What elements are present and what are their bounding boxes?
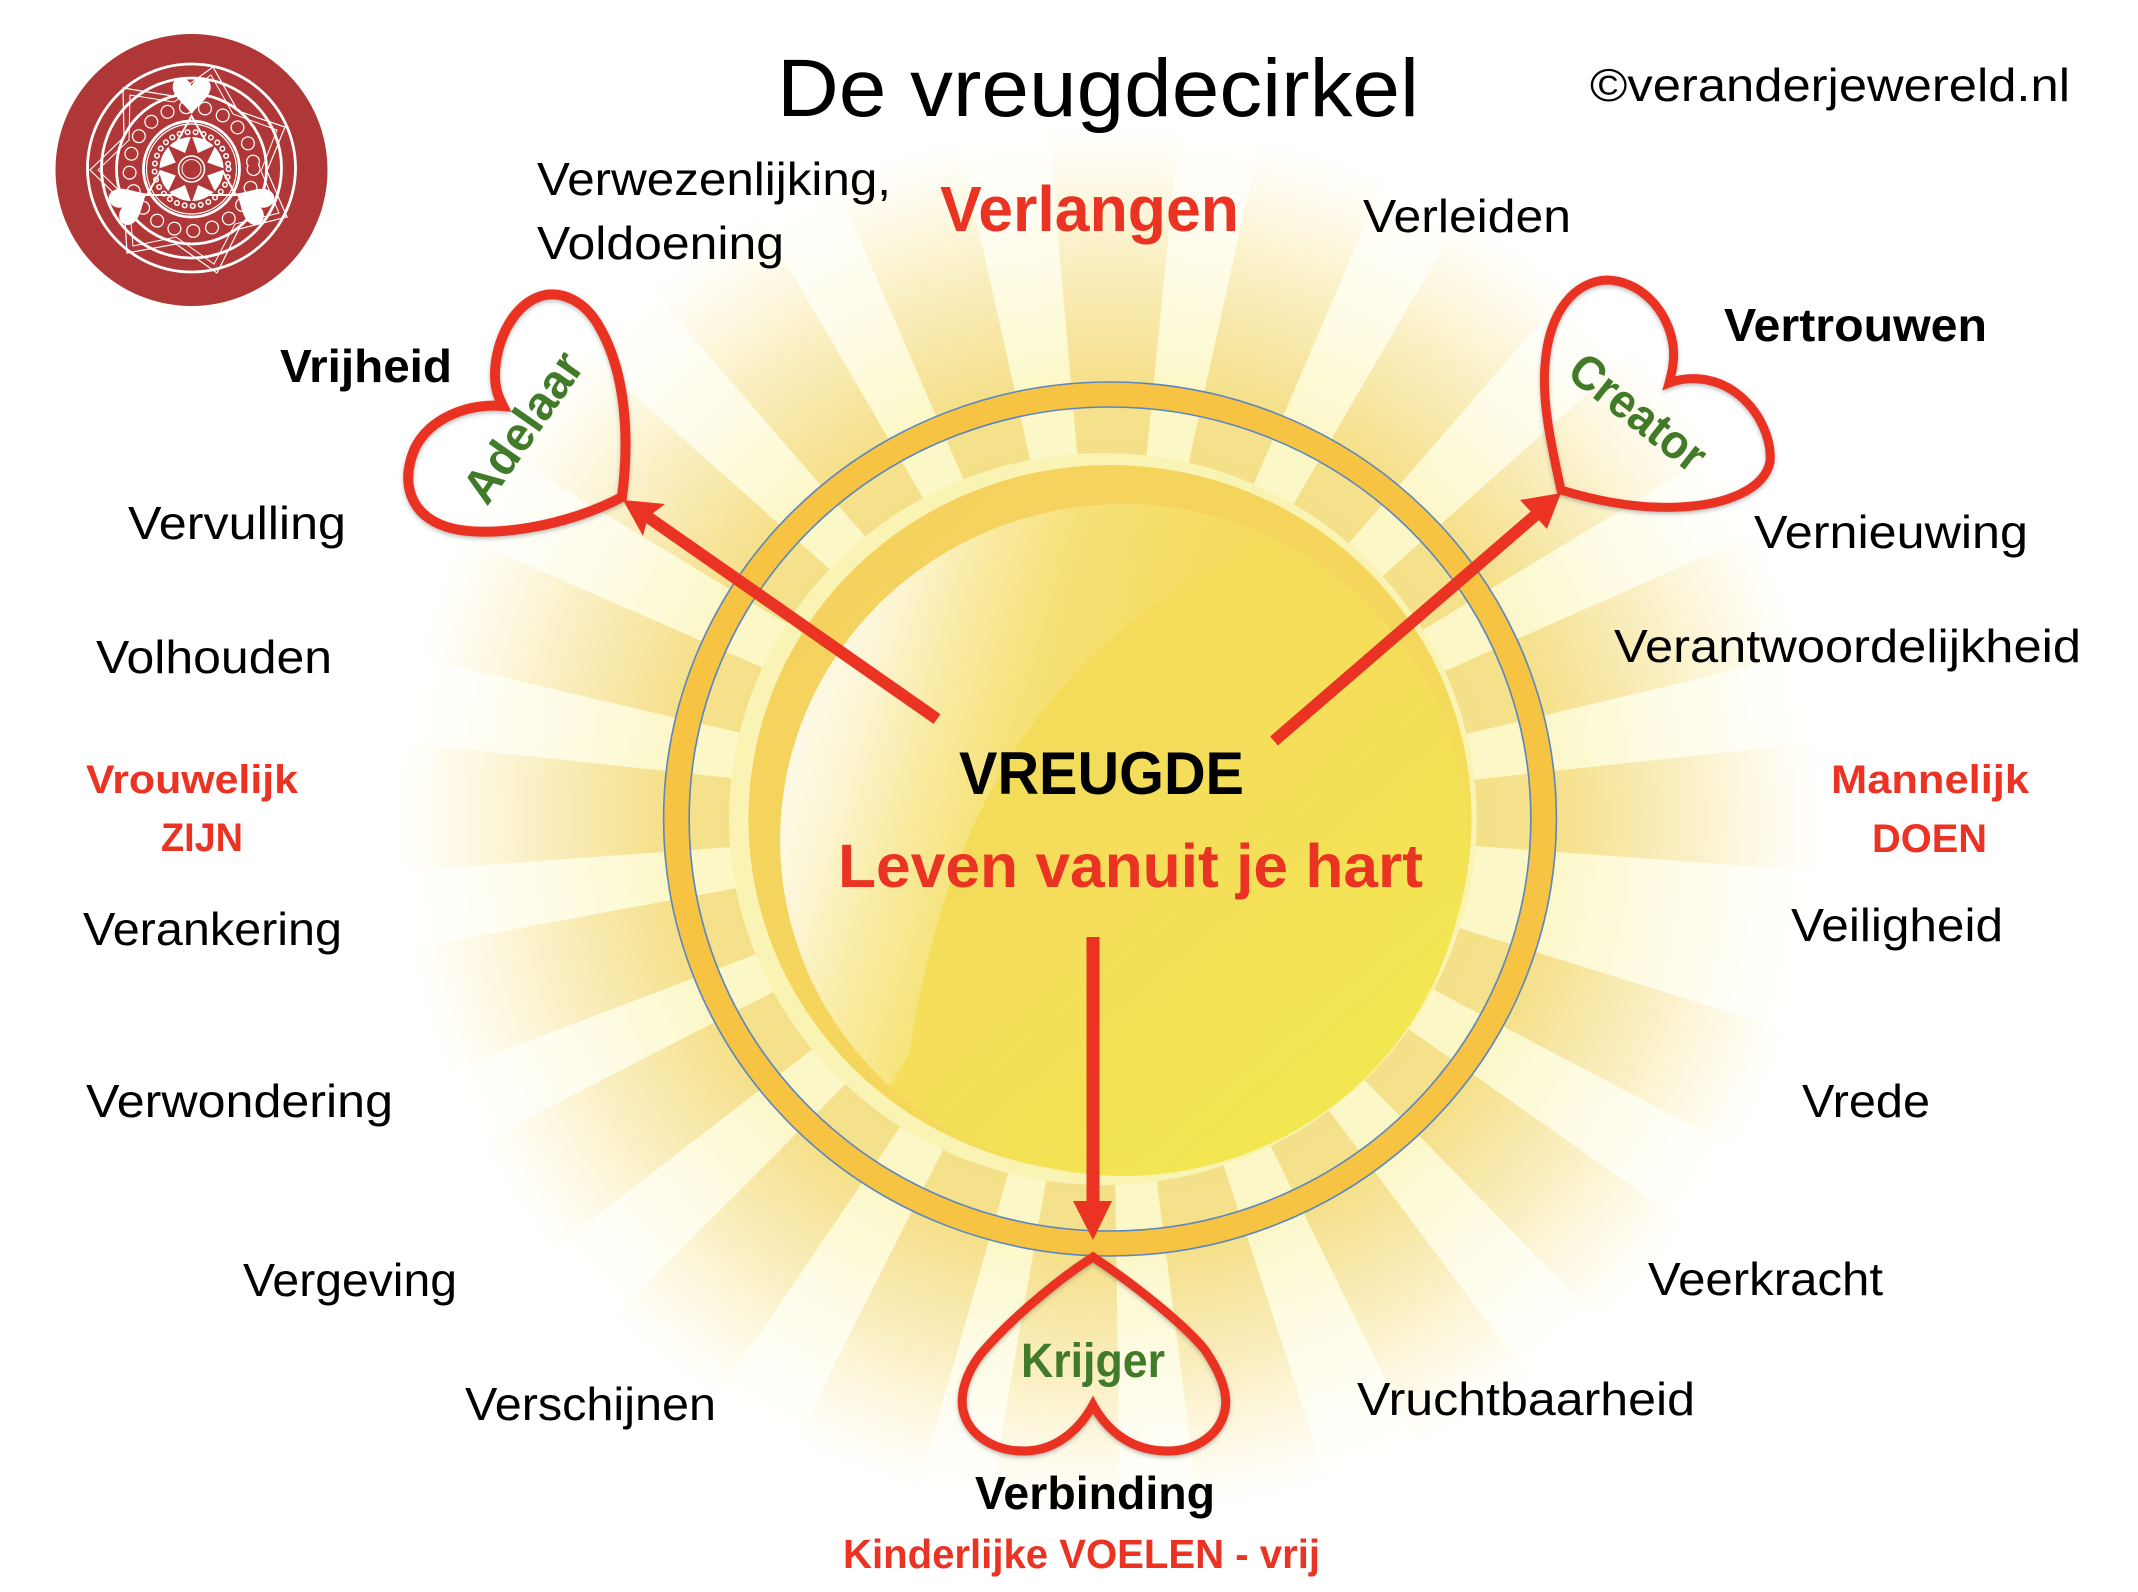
outer golden ring: [676, 394, 1544, 1244]
heart: Krijger: [962, 1257, 1226, 1451]
sun rays: [394, 119, 1826, 1522]
label: Verbinding: Verbinding: [975, 1467, 1215, 1519]
pale inner ring: [729, 453, 1477, 1185]
center subheading: Leven vanuit je hart: [838, 832, 1423, 900]
label: Veerkracht: Veerkracht: [1648, 1253, 1883, 1305]
label: Verwezenlijking: Verwezenlijking,: [537, 153, 891, 205]
label: Verleiden: Verleiden: [1363, 190, 1571, 242]
label: Verlangen: Verlangen: [940, 173, 1239, 245]
label: ZIJN: ZIJN: [161, 816, 243, 860]
inner disc: [780, 504, 1458, 1176]
label: Mannelijk: Mannelijk: [1831, 758, 2030, 802]
label: Vergeving: Vergeving: [243, 1254, 457, 1306]
title: De vreugdecirkel: [777, 43, 1419, 134]
label: DOEN: DOEN: [1872, 817, 1987, 861]
label: Vervulling: Vervulling: [128, 497, 346, 549]
label: Vrouwelijk: Vrouwelijk: [86, 758, 299, 802]
label: Kinderlijke VOELEN - vrij: Kinderlijke VOELEN - vrij: [843, 1531, 1320, 1577]
arrow: to Creator: [1274, 493, 1561, 741]
orange band: [748, 465, 1472, 1173]
heart: Adelaar: [408, 294, 626, 532]
label: Volhouden: Volhouden: [96, 631, 332, 683]
heart: Creator: [1544, 280, 1770, 507]
logo: mandala: [56, 34, 328, 306]
heart label: Adelaar: Adelaar: [453, 342, 595, 513]
label: Verwondering: Verwondering: [86, 1075, 393, 1127]
label: Verantwoordelijkheid: Verantwoordelijkheid: [1614, 620, 2081, 672]
arrow: to Krijger: [1073, 937, 1112, 1240]
label: Veiligheid: Veiligheid: [1791, 899, 2003, 951]
label: Verschijnen: Verschijnen: [465, 1378, 716, 1430]
label: Vertrouwen: Vertrouwen: [1724, 299, 1987, 351]
sun with rays: [394, 119, 1826, 1522]
center heading: VREUGDE: VREUGDE: [959, 740, 1244, 807]
label: Voldoening: Voldoening: [537, 217, 784, 269]
heart label: Creator: Creator: [1558, 343, 1717, 483]
arrow: to Adelaar: [623, 500, 937, 719]
label: Vernieuwing: Vernieuwing: [1754, 506, 2028, 558]
label: Vrede: Vrede: [1802, 1075, 1930, 1127]
label: Vruchtbaarheid: Vruchtbaarheid: [1357, 1373, 1695, 1425]
heart label: Krijger: Krijger: [1021, 1335, 1165, 1388]
label: Verankering: Verankering: [83, 903, 342, 955]
label: Vrijheid: Vrijheid: [280, 340, 452, 392]
copyright: ©veranderjewereld.nl: [1590, 59, 2070, 111]
